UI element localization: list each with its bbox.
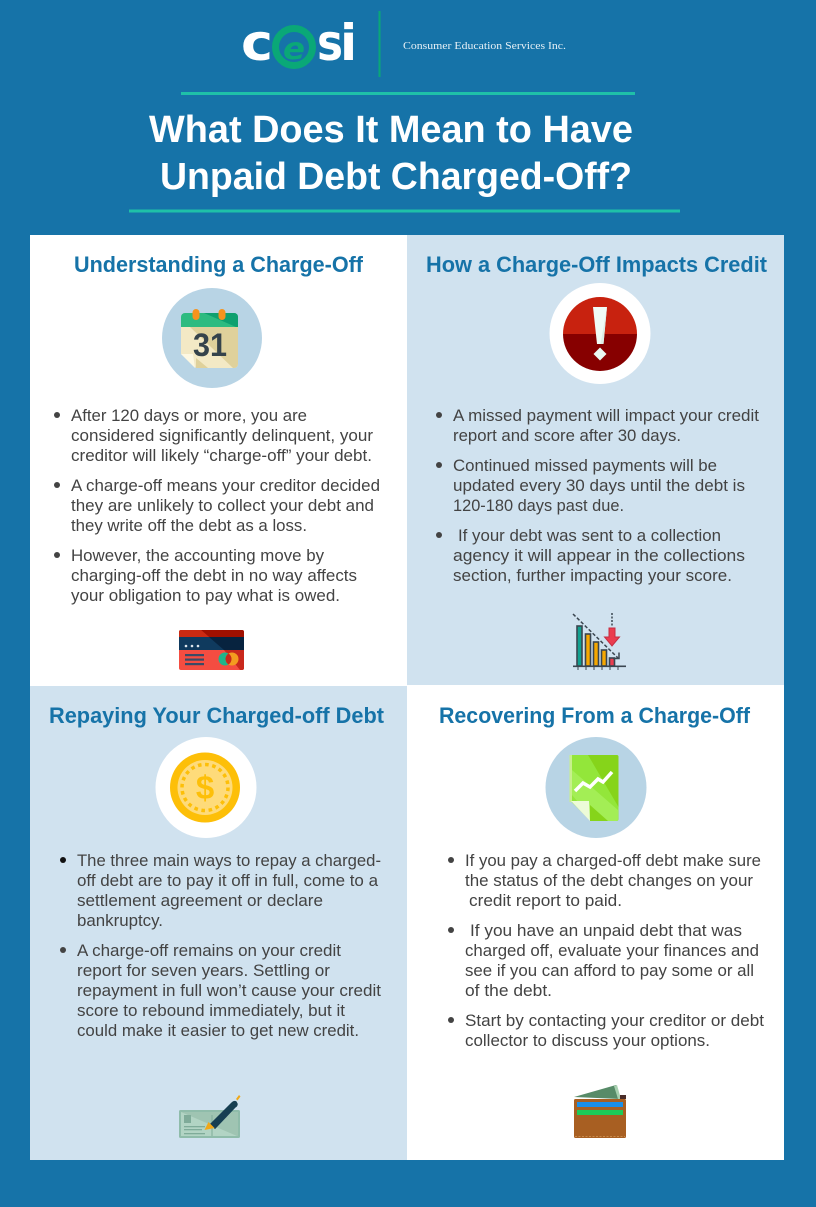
icon: wallet xyxy=(574,1085,626,1138)
heading: Repaying Your Charged-off Debt xyxy=(49,703,385,728)
title: What Does It Mean to Have xyxy=(149,109,633,151)
icon: coin xyxy=(156,737,256,838)
bullet list: they are unlikely to collect your debt and xyxy=(71,497,374,515)
icon: coin: $ xyxy=(196,769,214,806)
bullet list: score to rebound immediately, but it xyxy=(77,1002,345,1020)
bullet list xyxy=(436,407,759,585)
bullet list: see if you can afford to pay some or all xyxy=(465,962,754,980)
bullet list: section, further impacting your score. xyxy=(453,567,732,585)
panel: understanding a charge-off xyxy=(30,235,407,686)
bullet list: charging-off the debt in no way affects xyxy=(71,567,357,585)
title: Unpaid Debt Charged-Off? xyxy=(160,156,632,198)
bullet list: A charge-off remains on your credit xyxy=(77,942,341,960)
logo wordmark: e xyxy=(283,32,305,67)
bullet list: report for seven years. Settling or xyxy=(77,962,331,980)
heading: Recovering From a Charge-Off xyxy=(439,703,751,728)
logo wordmark xyxy=(241,14,357,72)
bullet list: your obligation to pay what is owed. xyxy=(71,587,340,605)
icon: calendar xyxy=(162,288,262,388)
heading: How a Charge-Off Impacts Credit xyxy=(426,252,768,277)
bullet list: off debt are to pay it off in full, come to a xyxy=(77,872,379,890)
bullet list: 120-180 days past due. xyxy=(453,497,624,515)
bullet list: report and score after 30 days. xyxy=(453,427,681,445)
bullet list: The three main ways to repay a charged- xyxy=(77,852,381,870)
panel: repaying your charged-off debt xyxy=(30,686,407,1160)
icon: check and pen xyxy=(179,1095,240,1138)
logo tagline: Consumer Education Services Inc. xyxy=(403,40,566,52)
bullet list: If you have an unpaid debt that was xyxy=(470,922,742,940)
bullet list: creditor will likely “charge-off” your debt. xyxy=(71,447,372,465)
icon: declining bar chart xyxy=(573,613,626,670)
bullet list: credit report to paid. xyxy=(469,892,622,910)
heading: Understanding a Charge-Off xyxy=(74,252,364,277)
bullet list: collector to discuss your options. xyxy=(465,1032,710,1050)
bullet list: updated every 30 days until the debt is xyxy=(453,477,745,495)
logo wordmark: i xyxy=(340,14,357,72)
bullet list: bankruptcy. xyxy=(77,912,163,930)
bullet list: However, the accounting move by xyxy=(71,547,325,565)
bullet list: could make it easier to get new credit. xyxy=(77,1022,359,1040)
bullet list: repayment in full won’t cause your credit xyxy=(77,982,381,1000)
logo wordmark: s xyxy=(317,14,343,72)
panel: recovering from a charge-off xyxy=(407,685,784,1160)
panel: how a charge-off impacts credit xyxy=(407,235,784,685)
icon: warning xyxy=(550,283,650,384)
logo wordmark: c xyxy=(241,14,273,72)
bullet list: Start by contacting your creditor or debt xyxy=(465,1012,764,1030)
bullet list: of the debt. xyxy=(465,982,552,1000)
bullet list: they write off the debt as a loss. xyxy=(71,517,307,535)
header: logo xyxy=(241,11,566,77)
bullet list xyxy=(448,852,764,1050)
bullet list: If your debt was sent to a collection xyxy=(458,527,721,545)
bullet list xyxy=(60,852,381,1040)
bullet list: considered significantly delinquent, your xyxy=(71,427,374,445)
icon: growth document xyxy=(546,737,646,838)
bullet list: settlement agreement or declare xyxy=(77,892,323,910)
bullet list: After 120 days or more, you are xyxy=(71,407,307,425)
bullet list: agency it will appear in the collections xyxy=(453,547,745,565)
icon: calendar: 31 xyxy=(193,327,227,363)
bullet list: A charge-off means your creditor decided xyxy=(71,477,380,495)
icon: credit card xyxy=(179,630,244,670)
bullet list: A missed payment will impact your credit xyxy=(453,407,759,425)
bullet list: Continued missed payments will be xyxy=(453,457,717,475)
bullet list: charged off, evaluate your finances and xyxy=(465,942,759,960)
title xyxy=(149,109,633,198)
bullet list: the status of the debt changes on your xyxy=(465,872,754,890)
bullet list xyxy=(54,407,380,605)
bullet list: If you pay a charged-off debt make sure xyxy=(465,852,761,870)
